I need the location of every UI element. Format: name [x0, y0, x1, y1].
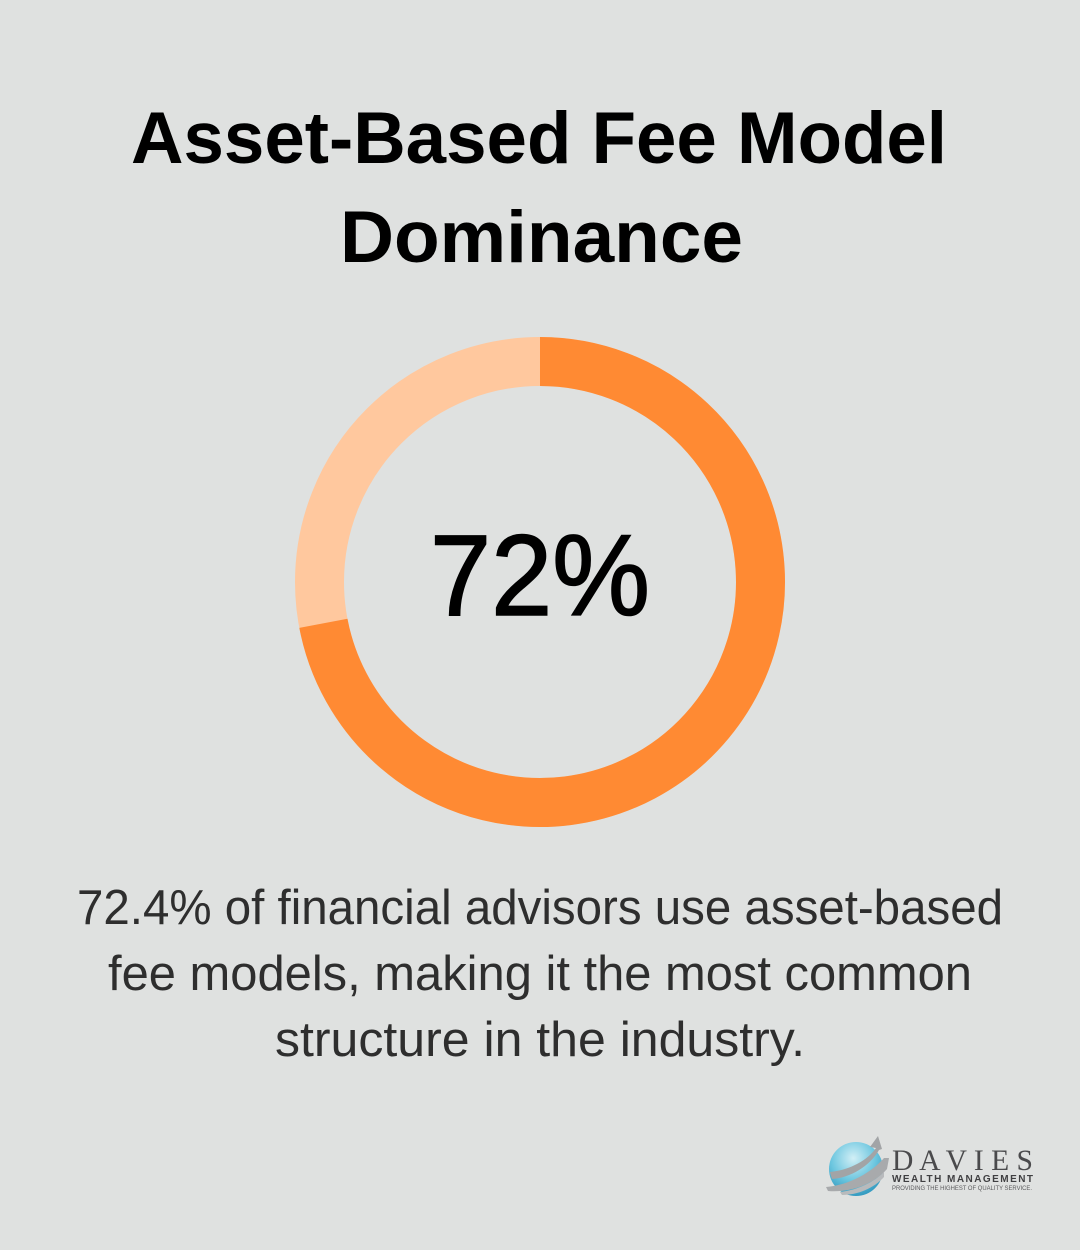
wordmark: Wealth Management: WEALTH MANAGEMENT	[892, 1174, 1033, 1185]
title: Dominance	[340, 197, 743, 278]
icon: globe with arrows	[826, 1136, 889, 1196]
title: Asset-Based Fee Model	[131, 98, 947, 179]
tagline: PROVIDING THE HIGHEST OF QUALITY SERVICE.	[892, 1185, 1032, 1192]
description text: fee models, making it the most common	[108, 947, 972, 1001]
description text: structure in the industry.	[275, 1013, 805, 1067]
title	[131, 98, 947, 278]
wordmark: DAVIES: D A V I E S	[892, 1144, 1033, 1177]
description text: 72.4% of financial advisors use asset-based	[77, 881, 1003, 935]
donut value: 72%	[430, 512, 650, 640]
donut chart: 72%	[320, 362, 760, 802]
logo: Davies Wealth Management	[826, 1136, 1033, 1196]
description text	[77, 881, 1003, 1067]
